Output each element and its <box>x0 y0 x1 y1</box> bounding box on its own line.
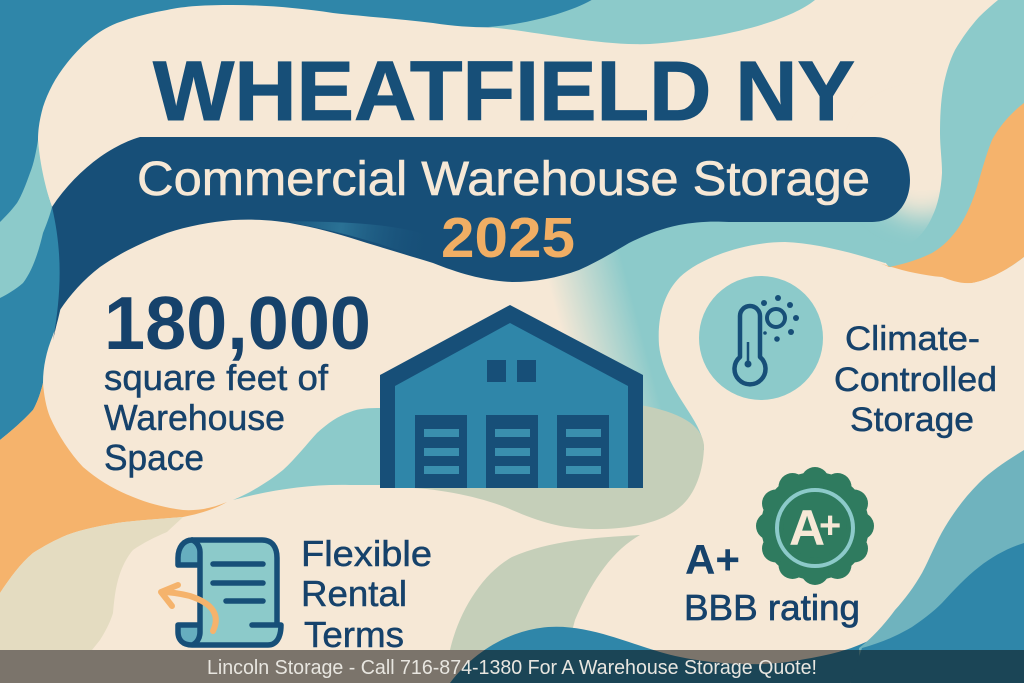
feature: climate-controlled storage: Climate- <box>845 320 980 358</box>
shape: teal bottom centre wave <box>450 627 870 683</box>
shape: beige lower left wave <box>0 517 183 650</box>
stat: 180,000 square feet: 180,000 <box>104 281 371 365</box>
shape: light teal right wave <box>885 0 1024 270</box>
shape: cream below right waves <box>945 257 1024 300</box>
stat: 180,000 square feet: Warehouse <box>104 397 285 438</box>
shape: sage lower centre <box>450 535 640 650</box>
shape: light teal centre field <box>480 190 945 460</box>
feature: A+ BBB rating <box>684 536 860 628</box>
icon: A+ badge <box>756 467 874 585</box>
shape: soft cream fade beside ribbon end <box>870 113 974 217</box>
shape: sage blob behind warehouse <box>413 405 704 529</box>
feature: flexible rental terms: Flexible <box>301 533 432 574</box>
stat: 180,000 square feet: square feet of <box>104 357 329 398</box>
icon: rental scroll <box>161 540 281 645</box>
stat: 180,000 square feet: Space <box>104 437 204 478</box>
shape: dark teal top and left wave <box>0 0 592 440</box>
footer text: Lincoln Storage - Call 716-874-1380 For A Warehouse Storage Quote! <box>207 657 817 679</box>
feature: climate-controlled storage <box>834 320 997 439</box>
feature: climate-controlled storage: Storage <box>850 401 974 439</box>
feature: A+ BBB rating: BBB rating <box>684 587 860 628</box>
icon: warehouse <box>380 305 643 488</box>
title ribbon <box>52 137 910 340</box>
feature: flexible rental terms: Terms <box>304 614 404 655</box>
feature: climate-controlled storage: Controlled <box>834 361 997 399</box>
shape: light teal left wave <box>0 140 52 298</box>
shape: light teal top band <box>488 0 815 44</box>
shape: orange right wave <box>879 103 1024 283</box>
ribbon lower highlight <box>280 221 440 262</box>
feature: flexible rental terms <box>301 533 432 655</box>
icon: A+ badge: + <box>819 505 841 547</box>
year: 2025: 2025 <box>441 206 575 270</box>
shape: teal bump left of warehouse <box>233 408 385 500</box>
shape: orange left wave <box>0 383 227 593</box>
shape: dark teal bottom right wave <box>850 543 1024 683</box>
icon: thermometer and sun <box>699 276 823 400</box>
subtitle: Commercial Warehouse Storage: Commercial Warehouse Storage <box>137 153 870 206</box>
feature: A+ BBB rating: A+ <box>685 536 740 583</box>
footer bar <box>0 650 1024 683</box>
feature: flexible rental terms: Rental <box>301 573 407 614</box>
stat: 180,000 square feet <box>104 281 371 478</box>
icon: A+ badge: A <box>789 500 825 556</box>
heading: Wheatfield NY: WHEATFIELD NY <box>153 44 855 138</box>
shape: light teal bottom right wave <box>859 450 1024 683</box>
